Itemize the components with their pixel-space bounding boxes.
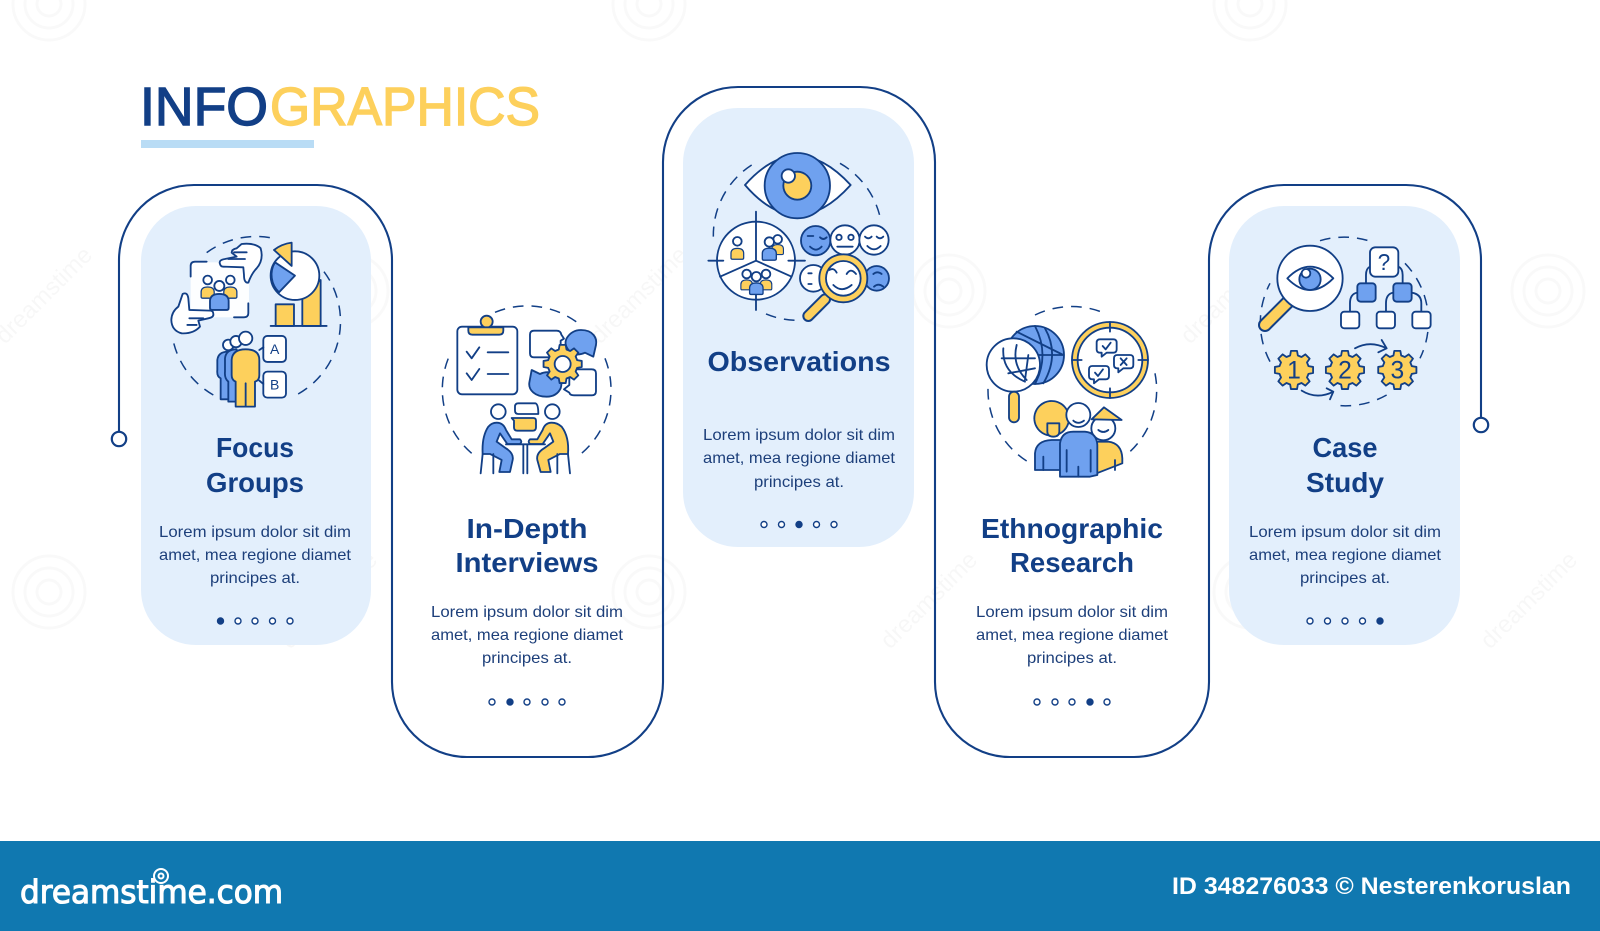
text: observations description xyxy=(703,427,896,491)
text: case study description xyxy=(1249,524,1442,587)
text: ethnographic description: amet, mea regione diamet xyxy=(976,627,1169,644)
pagination dots xyxy=(218,618,293,624)
faint watermark pattern: dreamstime xyxy=(875,546,983,654)
faint watermark pattern: dreamstime xyxy=(275,546,383,654)
panel: case study xyxy=(1249,237,1442,624)
title: INFOGRAPHICS xyxy=(140,77,540,137)
heading: Case Study: Case xyxy=(1312,432,1378,463)
text: interviews description: Lorem ipsum dolor sit dim xyxy=(431,604,623,621)
pagination dots xyxy=(1034,699,1110,705)
heading: Observations: Observations xyxy=(708,346,890,377)
continuous outline connecting the five cards xyxy=(119,87,1481,757)
icon: focus groups: A xyxy=(270,341,280,357)
title underline xyxy=(141,140,314,148)
outline start marker xyxy=(112,432,126,446)
heading: Ethnographic Research: Research xyxy=(1010,547,1134,578)
text: observations description: principes at. xyxy=(754,474,844,491)
image id and author: ID 348276033 © Nesterenkoruslan xyxy=(1172,873,1571,900)
icon: case study xyxy=(1260,237,1431,406)
heading: Focus Groups xyxy=(206,432,304,498)
text: interviews description xyxy=(431,604,624,667)
icon: focus groups xyxy=(171,236,340,407)
logo: dreamstime.com: dreamstime.com xyxy=(20,873,283,911)
icon: case study: 2 xyxy=(1338,358,1352,385)
icon: case study: 3 xyxy=(1390,358,1404,385)
icon: focus groups: B xyxy=(270,377,279,393)
text: focus groups description xyxy=(159,524,352,587)
heading: In-Depth Interviews: In-Depth xyxy=(466,513,588,544)
text: observations description: Lorem ipsum dolor sit dim xyxy=(703,427,895,444)
text: interviews description: principes at. xyxy=(482,650,572,667)
icon: observations xyxy=(708,153,889,320)
heading: Focus Groups: Groups xyxy=(206,467,304,498)
footer banner xyxy=(0,841,1600,931)
text: focus groups description: amet, mea regione diamet xyxy=(159,547,352,564)
pagination dots xyxy=(1307,618,1383,624)
heading: Case Study xyxy=(1306,432,1385,498)
text: ethnographic description: Lorem ipsum dolor sit dim xyxy=(976,604,1168,621)
panel: observations xyxy=(703,153,896,528)
title: INFOGRAPHICS: GRAPHICS xyxy=(270,77,540,137)
panel backgrounds xyxy=(141,108,1460,645)
outline end marker xyxy=(1474,418,1488,432)
pagination dots xyxy=(489,699,565,705)
icon: case study: 1 xyxy=(1287,358,1301,385)
pagination dots xyxy=(761,522,837,528)
text: focus groups description: Lorem ipsum dolor sit dim xyxy=(159,524,351,541)
panel: in-depth interviews xyxy=(431,306,624,705)
text: case study description: Lorem ipsum dolor sit dim xyxy=(1249,524,1441,541)
title: INFOGRAPHICS: INFO xyxy=(140,77,268,137)
faint watermark pattern: dreamstime xyxy=(1175,241,1283,349)
icon: in-depth interviews xyxy=(442,306,611,473)
heading: In-Depth Interviews: Interviews xyxy=(456,547,598,578)
text: case study description: amet, mea regione diamet xyxy=(1249,547,1442,564)
panel: focus groups xyxy=(159,236,352,624)
text: interviews description: amet, mea regione diamet xyxy=(431,627,624,644)
icon: case study: ? xyxy=(1378,249,1390,275)
text: ethnographic description xyxy=(976,604,1169,667)
panel: ethnographic research xyxy=(976,307,1169,705)
text: case study description: principes at. xyxy=(1300,570,1390,587)
heading: In-Depth Interviews xyxy=(456,513,598,578)
heading: Case Study: Study xyxy=(1306,467,1385,498)
faint watermark pattern: dreamstime xyxy=(1475,546,1583,654)
heading: Ethnographic Research xyxy=(981,513,1163,578)
faint watermark pattern: dreamstime xyxy=(585,241,693,349)
text: observations description: amet, mea regione diamet xyxy=(703,450,896,467)
heading: Ethnographic Research: Ethnographic xyxy=(981,513,1163,544)
text: ethnographic description: principes at. xyxy=(1027,650,1117,667)
icon: ethnographic research xyxy=(987,307,1157,477)
text: focus groups description: principes at. xyxy=(210,570,300,587)
heading: Focus Groups: Focus xyxy=(216,432,294,463)
faint watermark pattern xyxy=(0,0,1584,654)
